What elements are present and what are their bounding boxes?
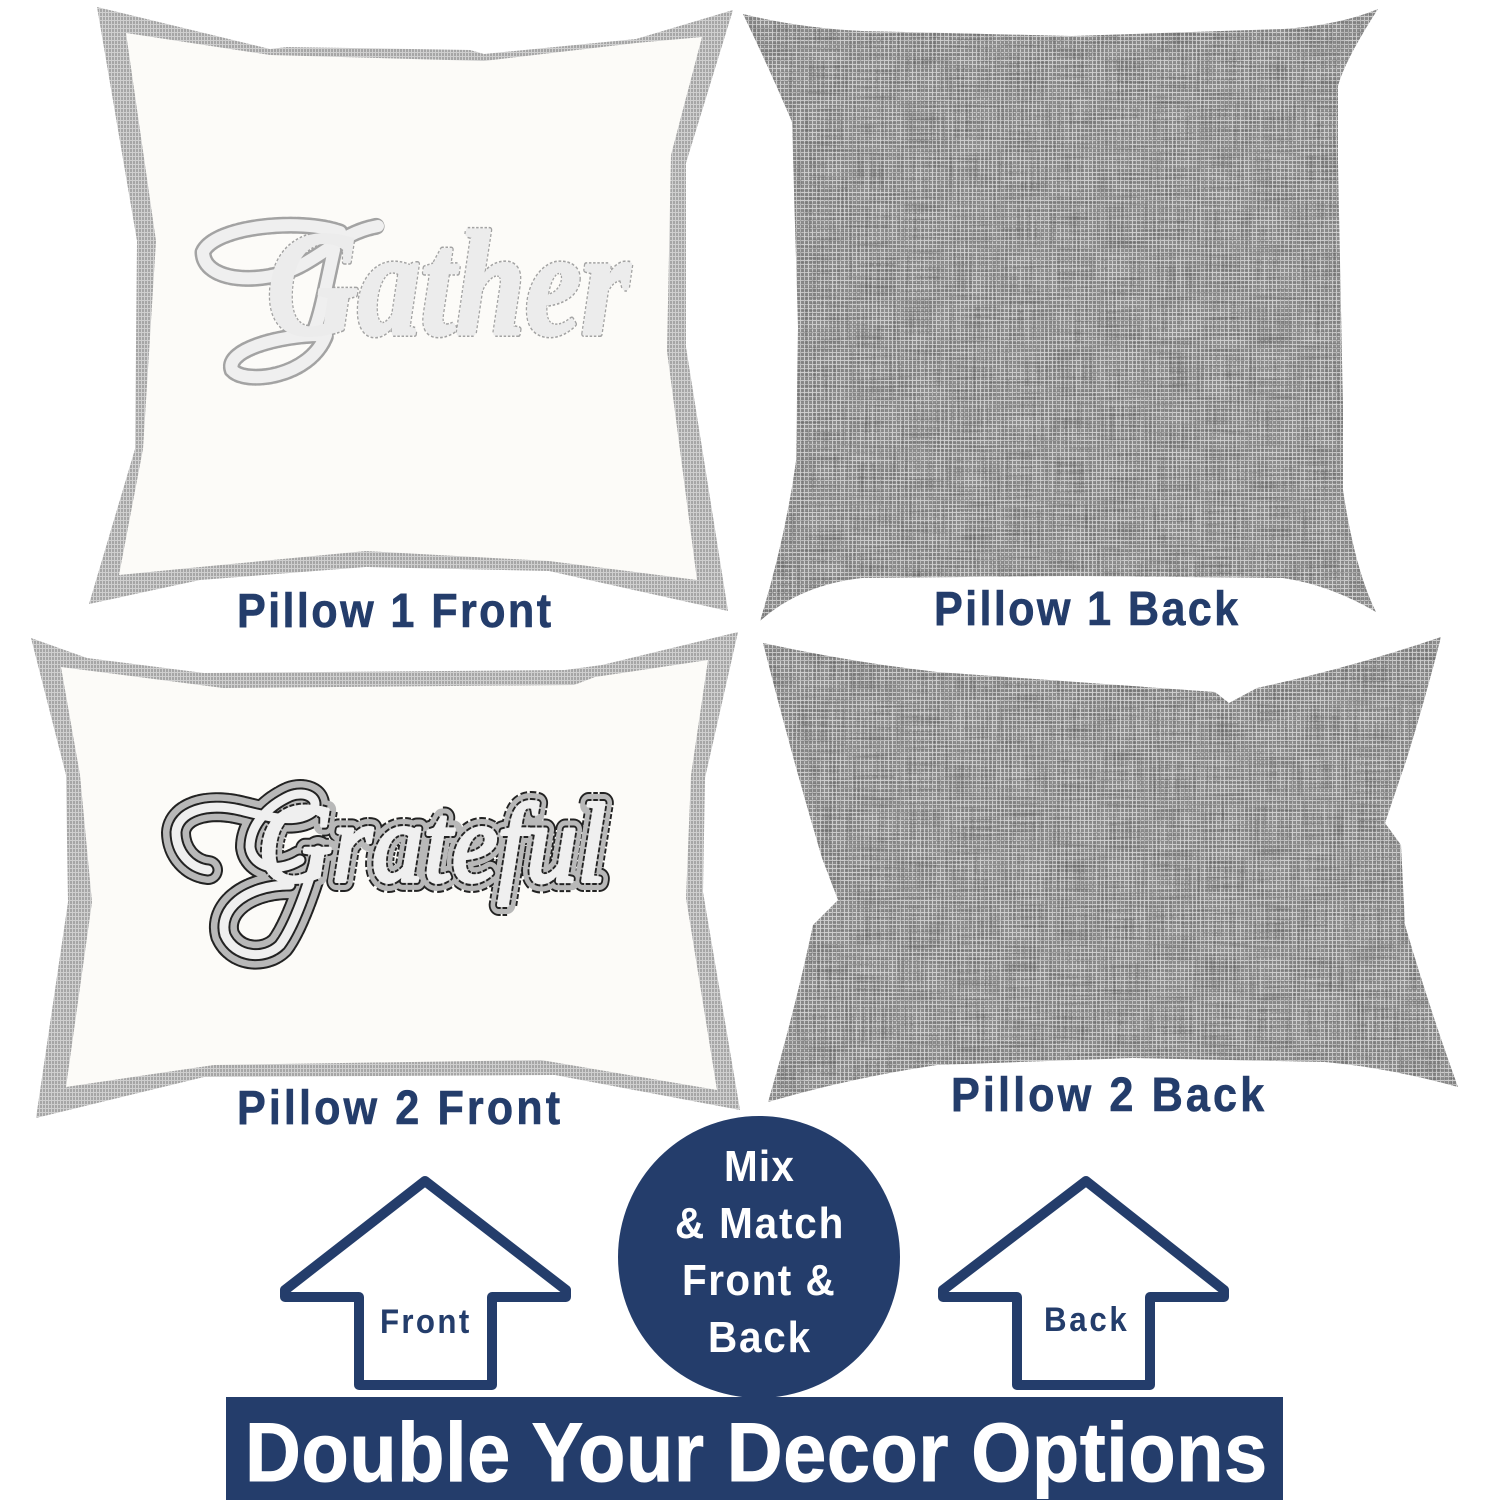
embroidered word: Grateful: Grateful (258, 782, 606, 906)
embroidered word: Grateful: Grateful (258, 782, 606, 906)
embroidered word: Gather: Gather (267, 201, 631, 367)
caption: Pillow 1 Back: Pillow 1 Back (934, 582, 1239, 636)
badge: mix and match: Back (708, 1312, 811, 1361)
arrow: front (285, 1181, 566, 1385)
embroidered word: Grateful (176, 782, 606, 955)
embroidered word: Gather (203, 201, 631, 377)
embroidered word: Gather: Gather (267, 201, 631, 367)
arrow: back: Back (1044, 1300, 1128, 1338)
pillow 2 front (31, 632, 740, 1118)
arrow: back (943, 1181, 1224, 1385)
embroidered word: Grateful: Grateful (258, 782, 606, 906)
badge: mix and match: & Match (675, 1198, 843, 1247)
pillow 1 front (89, 7, 733, 611)
caption: Pillow 1 Front: Pillow 1 Front (237, 584, 551, 638)
banner: Double Your Decor Options (245, 1406, 1267, 1500)
embroidered word: Grateful: Grateful (258, 782, 606, 906)
badge: mix and match (618, 1116, 900, 1398)
pillow 2 back (763, 637, 1458, 1102)
caption: Pillow 2 Front: Pillow 2 Front (237, 1081, 560, 1135)
pillow 1 back (743, 9, 1378, 621)
badge: mix and match: Front & (682, 1255, 835, 1304)
arrow: front: Front (380, 1302, 469, 1340)
caption: Pillow 2 Back: Pillow 2 Back (951, 1068, 1265, 1122)
badge: mix and match: Mix (724, 1141, 794, 1190)
